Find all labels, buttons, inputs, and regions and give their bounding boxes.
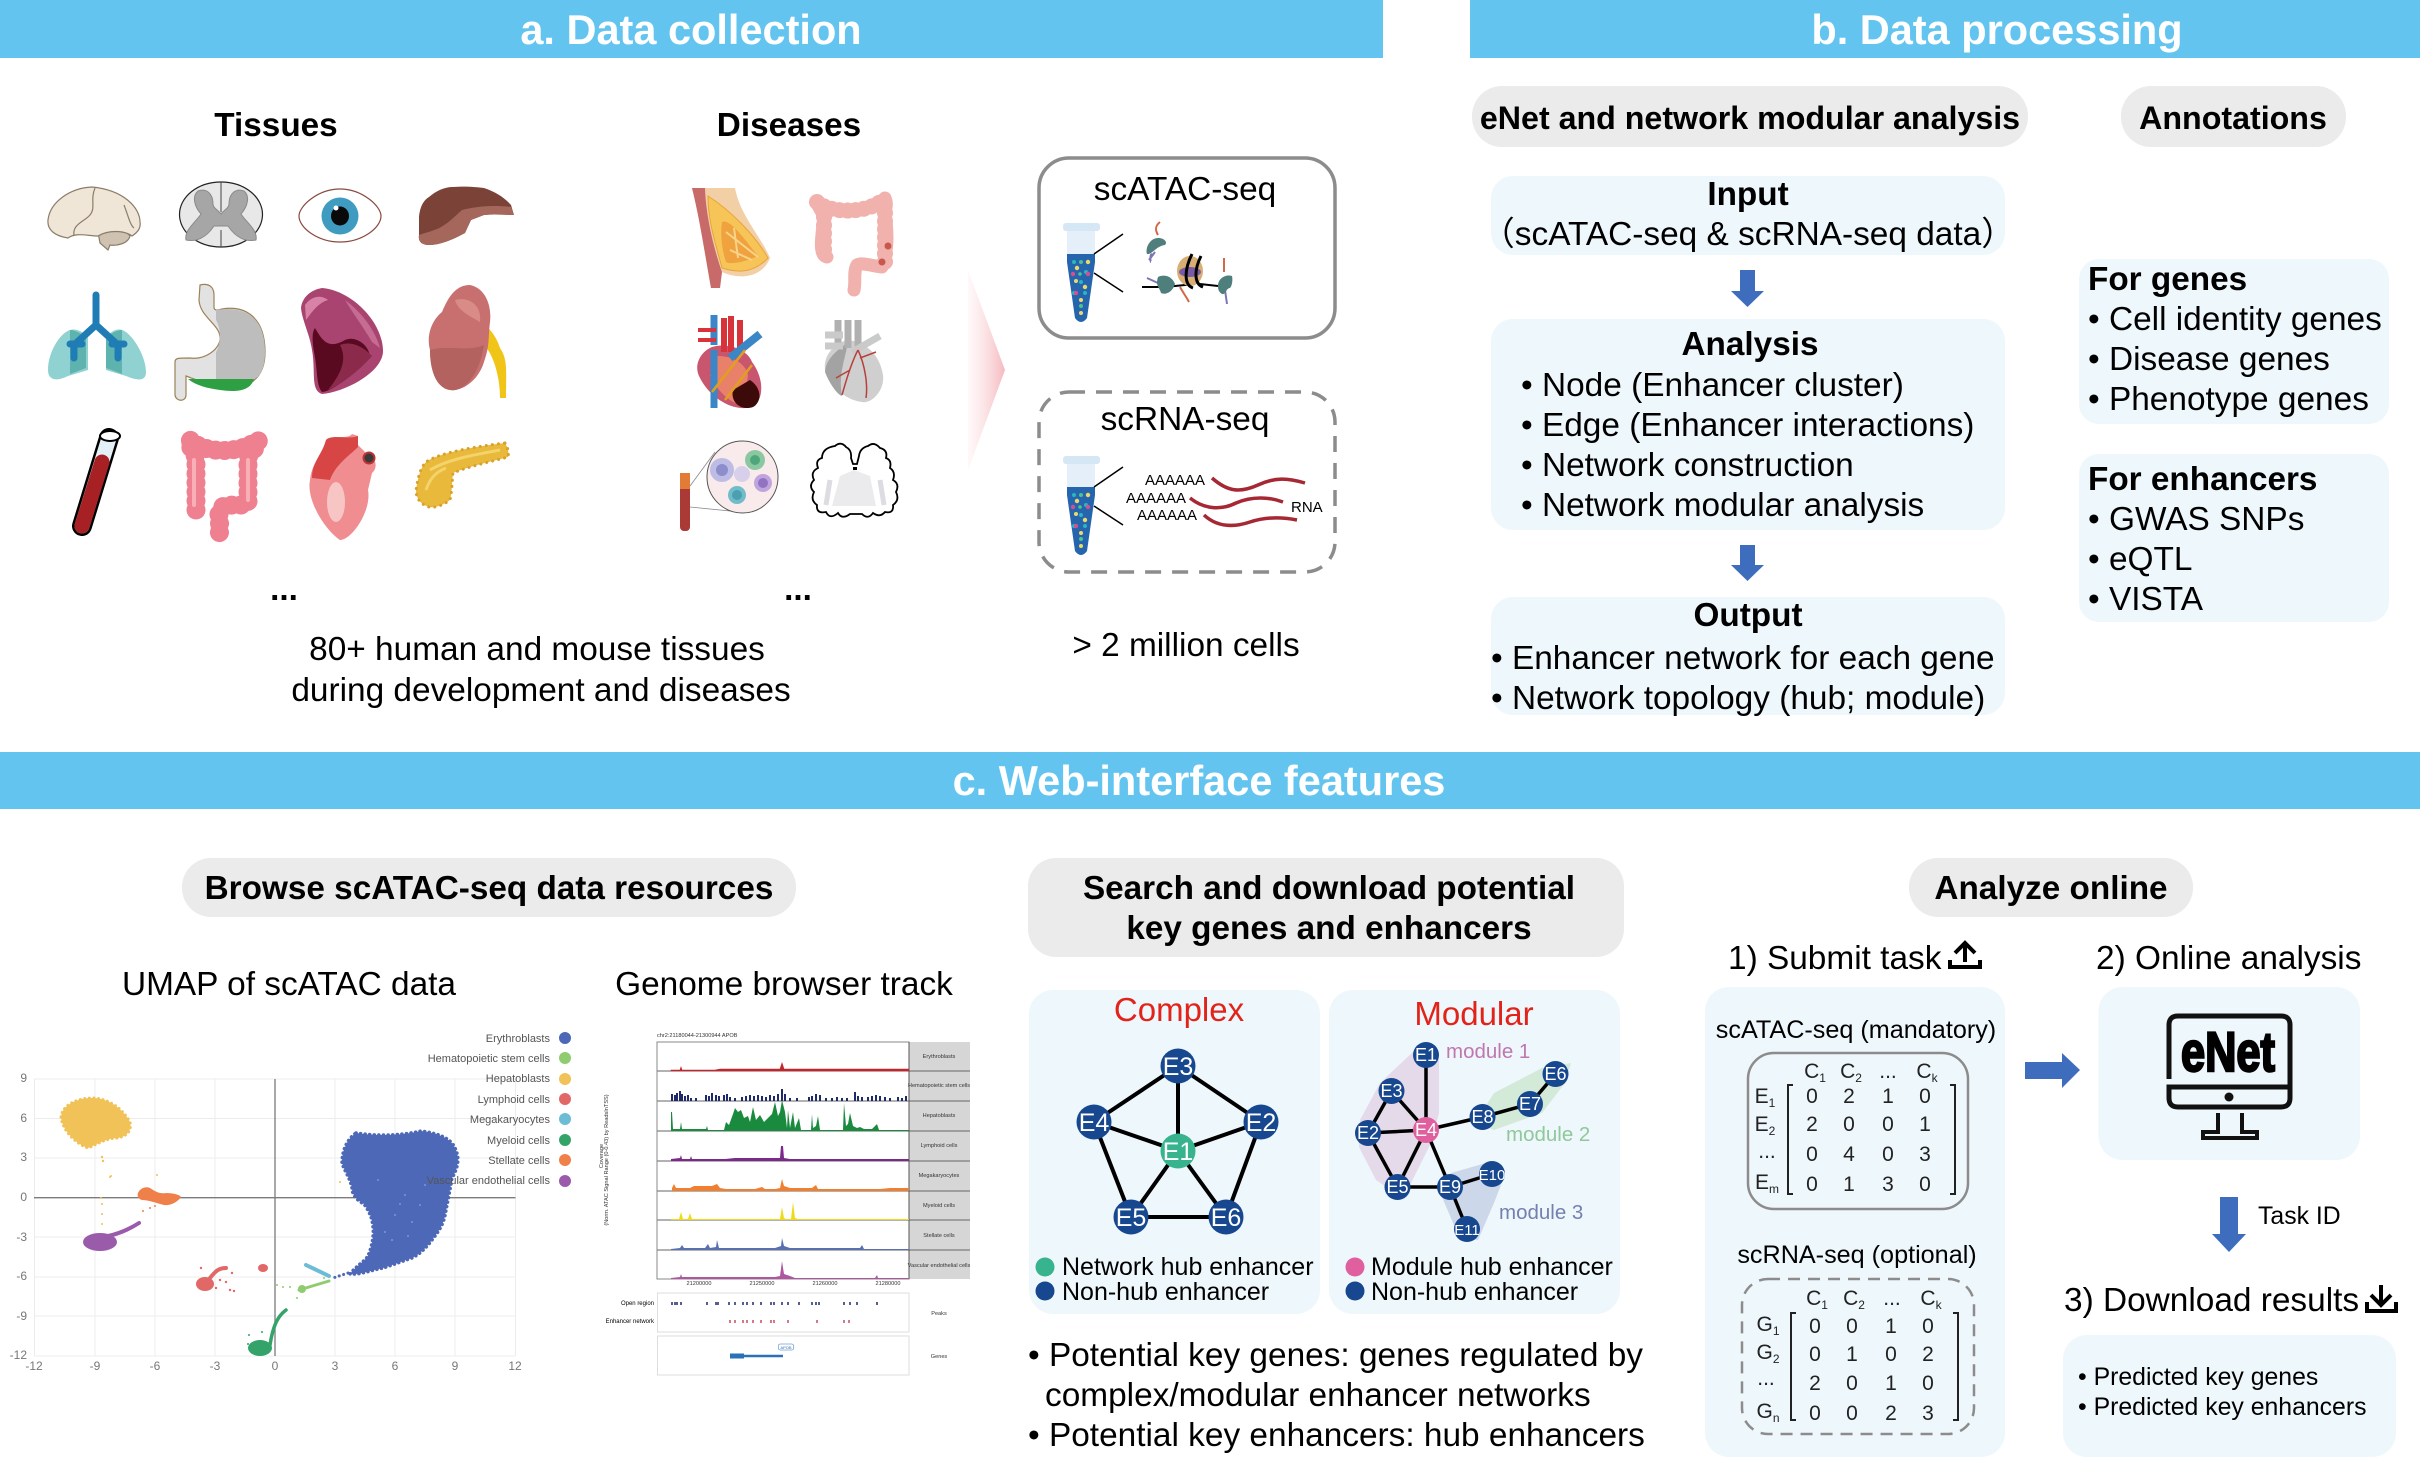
matrix: scATAC-seq: 1 — [1919, 1113, 1931, 1136]
matrix: scRNA-seq: 1 — [1773, 1324, 1780, 1338]
heading: UMAP: UMAP of scATAC data — [122, 966, 456, 1003]
nodes: E6 — [1211, 1204, 1241, 1232]
nodes — [1355, 1042, 1568, 1242]
module labels: module 2 — [1506, 1123, 1590, 1146]
track labels: Erythroblasts — [923, 1054, 956, 1060]
matrix: scATAC-seq: C — [1916, 1060, 1932, 1083]
icon: download — [2367, 1285, 2396, 1311]
matrix: scRNA-seq: G — [1756, 1341, 1773, 1364]
axis labels: 6 — [392, 1359, 399, 1373]
heading: Diseases: Diseases — [717, 107, 861, 144]
track labels: Myeloid cells — [923, 1203, 955, 1209]
panel: annotations for enhancers: • eQTL — [2088, 541, 2192, 578]
panel: annotations for genes: • Phenotype genes — [2088, 381, 2369, 418]
heading: Genome browser track: Genome browser track — [615, 966, 953, 1003]
text block: tissue summary — [291, 631, 791, 709]
legend: Hepatoblasts — [486, 1073, 550, 1085]
track labels: Hepatoblasts — [923, 1113, 956, 1119]
axis: 21200000 — [687, 1281, 711, 1287]
chart: UMAP scatter — [10, 1032, 571, 1373]
gene box — [658, 1336, 947, 1375]
matrix: scATAC-seq: m — [1769, 1182, 1779, 1196]
axis labels — [10, 1071, 522, 1373]
matrix: scRNA-seq: 2 — [1773, 1352, 1780, 1366]
matrix: scRNA-seq: 2 — [1885, 1402, 1897, 1425]
matrix: scRNA-seq: 1 — [1885, 1372, 1897, 1395]
matrix: scATAC-seq: 0 — [1919, 1173, 1931, 1196]
legend: Stellate cells — [488, 1155, 550, 1167]
axis: (Norm. ATAC Signal Range (0-0.43) by ReadsInTSS) — [604, 1094, 610, 1226]
matrix: scATAC-seq: E — [1755, 1113, 1769, 1136]
panel: modular network — [1329, 990, 1620, 1314]
arrow: collection to assays — [968, 270, 1005, 470]
nodes: E3 — [1163, 1053, 1193, 1081]
arrow: submit to analysis — [2025, 1053, 2080, 1088]
RNA strands: RNA — [1291, 499, 1323, 516]
module labels: module 1 — [1446, 1040, 1530, 1063]
matrix: scATAC-seq: 0 — [1882, 1113, 1894, 1136]
matrix: scRNA-seq: k — [1936, 1298, 1943, 1312]
heading pill: Browse scATAC-seq data resources — [182, 858, 796, 917]
nodes: E1 — [1415, 1045, 1437, 1065]
matrix: scRNA-seq: 0 — [1922, 1372, 1934, 1395]
track: stellate cells — [671, 1238, 909, 1250]
axis labels: 9 — [20, 1071, 27, 1085]
icon: spinal cord — [180, 182, 262, 247]
panel: scATAC-seq — [1039, 158, 1335, 338]
text block: potential key genes and enhancers: • Potential key enhancers: hub enhancers — [1028, 1417, 1645, 1454]
nodes: E9 — [1439, 1177, 1461, 1197]
matrix: scATAC-seq: 1 — [1769, 1096, 1776, 1110]
panel: scRNA-seq — [1039, 392, 1335, 572]
cluster: hepatoblasts — [61, 1098, 341, 1225]
matrix: scATAC-seq — [1748, 1053, 1968, 1209]
panel: complex network — [1029, 990, 1320, 1314]
nodes: E3 — [1380, 1081, 1403, 1101]
nodes: E1 — [1163, 1138, 1193, 1166]
axis labels: -6 — [16, 1269, 27, 1283]
nodes: E6 — [1544, 1064, 1567, 1084]
track labels: Megakaryocytes — [919, 1173, 960, 1179]
module labels — [1446, 1040, 1590, 1224]
panel: analysis: Analysis — [1682, 326, 1818, 363]
axis labels: 0 — [272, 1359, 279, 1373]
axis labels: -3 — [210, 1359, 221, 1373]
peaks box: Peaks — [931, 1311, 947, 1317]
panel: annotations for enhancers: • VISTA — [2088, 581, 2204, 618]
icon: blood and immune cells — [680, 441, 778, 531]
header: b. Data processing: b. Data processing — [1811, 6, 2183, 53]
heading: Tissues: Tissues — [214, 107, 338, 144]
text block: potential key genes and enhancers: • Potential key genes: genes regulated by — [1028, 1337, 1643, 1374]
axis labels: -6 — [150, 1359, 161, 1373]
peaks box — [606, 1293, 947, 1332]
cluster: lymphoid cells — [196, 1264, 268, 1292]
text block: tissue summary: 80+ human and mouse tissues — [309, 631, 765, 668]
legend: Erythroblasts — [486, 1033, 550, 1045]
icon: diseased colon — [817, 198, 892, 290]
matrix: scRNA-seq: 0 — [1885, 1343, 1897, 1366]
matrix: scRNA-seq: C — [1920, 1287, 1936, 1310]
icon: liver — [419, 187, 514, 245]
nodes: E5 — [1116, 1204, 1146, 1232]
nodes: E5 — [1386, 1177, 1409, 1197]
matrix: scRNA-seq: ... — [1757, 1367, 1775, 1390]
panel: submit task matrices: scRNA-seq (optional) — [1737, 1241, 1977, 1269]
cluster: stellate cells — [138, 1187, 181, 1212]
panel: annotations for enhancers: For enhancers — [2088, 461, 2317, 498]
matrix: scATAC-seq: E — [1755, 1171, 1769, 1194]
heading pill: eNet and network modular analysis: eNet and network modular analysis — [1480, 100, 2020, 136]
header: a. Data collection — [0, 0, 1383, 58]
panel: output: • Enhancer network for each gene — [1491, 640, 1995, 677]
panel: results: • Predicted key genes — [2078, 1364, 2318, 1391]
icon: lungs — [48, 295, 146, 379]
icon: breast — [692, 188, 770, 288]
heading: 3) Download results: 3) Download results — [2064, 1282, 2359, 1319]
panel: annotations for genes: • Cell identity genes — [2088, 301, 2382, 338]
panel: output: • Network topology (hub; module) — [1491, 680, 1985, 717]
panel: modular network: Modular — [1414, 995, 1534, 1032]
axis labels: 3 — [20, 1150, 27, 1164]
icon: eye — [299, 189, 381, 242]
matrix: scATAC-seq: k — [1932, 1071, 1939, 1085]
track: vascular endothelial cells — [671, 1261, 909, 1279]
panel: annotations for enhancers: • GWAS SNPs — [2088, 501, 2304, 538]
axis: 21260000 — [813, 1281, 837, 1287]
nodes: E2 — [1246, 1109, 1276, 1137]
panel: output: Output — [1693, 597, 1803, 634]
panel: complex network: Complex — [1114, 991, 1245, 1028]
text: cell count: > 2 million cells — [1072, 627, 1300, 664]
icon: upload — [1950, 943, 1980, 967]
arrow: analysis to output — [1731, 545, 1764, 581]
axis labels: -12 — [25, 1359, 43, 1373]
matrix: scRNA-seq: 0 — [1846, 1402, 1858, 1425]
matrix: scRNA-seq: 0 — [1809, 1402, 1821, 1425]
matrix: scATAC-seq: 2 — [1769, 1124, 1776, 1138]
matrix: scATAC-seq: 4 — [1843, 1143, 1855, 1166]
ellipsis: tissues: ... — [270, 571, 298, 608]
matrix: scATAC-seq: 3 — [1919, 1143, 1931, 1166]
panel: input: （scATAC-seq & scRNA-seq data） — [1481, 216, 2015, 253]
cluster: vascular endothelial cells — [83, 1223, 139, 1251]
header: a. Data collection: a. Data collection — [520, 6, 862, 53]
panel: input: Input — [1707, 176, 1789, 213]
matrix: scRNA-seq: 0 — [1809, 1315, 1821, 1338]
axis labels: -9 — [90, 1359, 101, 1373]
track: megakaryocytes — [672, 1179, 909, 1191]
heading pill: Annotations: Annotations — [2139, 100, 2327, 136]
matrix: scATAC-seq: 3 — [1882, 1173, 1894, 1196]
legend: Megakaryocytes — [470, 1114, 550, 1126]
legend: Hematopoietic stem cells — [428, 1053, 550, 1065]
matrix: scRNA-seq: G — [1756, 1313, 1773, 1336]
axis: Coverage — [599, 1144, 605, 1168]
matrix: scRNA-seq: ... — [1883, 1287, 1901, 1310]
matrix: scRNA-seq: C — [1806, 1287, 1821, 1310]
nodes: E10 — [1479, 1167, 1505, 1184]
matrix: scRNA-seq: 0 — [1846, 1372, 1858, 1395]
matrix: scATAC-seq: 0 — [1843, 1113, 1855, 1136]
icon: brain slice — [811, 444, 897, 517]
matrix: scATAC-seq: 0 — [1806, 1143, 1818, 1166]
RNA strands: AAAAAA — [1126, 490, 1186, 507]
axis labels: 6 — [20, 1111, 27, 1125]
heading: 2) Online analysis: 2) Online analysis — [2096, 940, 2361, 977]
text block: tissue summary: during development and diseases — [291, 672, 791, 709]
matrix: scRNA-seq: 2 — [1858, 1298, 1865, 1312]
panel: annotations for genes — [2079, 259, 2389, 424]
track: hematopoietic stem cells — [672, 1089, 906, 1101]
track labels: Vascular endothelial cells — [908, 1263, 971, 1269]
gene box: Genes — [931, 1354, 947, 1360]
panel: annotations for genes: For genes — [2088, 261, 2247, 298]
legend: Myeloid cells — [487, 1135, 550, 1147]
cluster: megakaryocytes — [306, 1265, 329, 1276]
matrix: scRNA-seq: 0 — [1846, 1315, 1858, 1338]
track labels: Stellate cells — [923, 1233, 955, 1239]
axis labels: -3 — [16, 1230, 27, 1244]
heading pill: Search and download — [1028, 858, 1624, 957]
header: b. Data processing — [1470, 0, 2420, 58]
matrix: scRNA-seq: G — [1756, 1400, 1773, 1423]
ellipsis: diseases: ... — [784, 571, 812, 608]
heading pill: Search and download: Search and download potential — [1083, 870, 1575, 907]
axis: 21250000 — [750, 1281, 774, 1287]
cluster: erythroblasts — [333, 1131, 458, 1278]
icon: eNet monitor — [2169, 1016, 2290, 1138]
legend — [427, 1032, 571, 1187]
module labels: module 3 — [1499, 1201, 1583, 1224]
cluster: hematopoietic stem cells — [276, 1277, 329, 1299]
panel: online analysis — [2098, 987, 2360, 1160]
legend: Non-hub enhancer — [1062, 1278, 1269, 1306]
panel: analysis: • Network modular analysis — [1521, 487, 1924, 524]
legend — [1346, 1253, 1613, 1306]
peaks box: Enhancer network — [606, 1319, 655, 1325]
header: c. Web-interface features: c. Web-interface features — [953, 757, 1445, 804]
panel: input — [1481, 176, 2015, 255]
RNA strands — [1126, 472, 1323, 525]
matrix: scATAC-seq: 2 — [1855, 1071, 1862, 1085]
heading pill: eNet and network modular analysis — [1472, 86, 2028, 147]
matrix: scATAC-seq: 1 — [1882, 1085, 1894, 1108]
track labels: Lymphoid cells — [921, 1143, 958, 1149]
panel: analysis — [1491, 319, 2005, 530]
peaks box: Open region — [621, 1301, 654, 1307]
matrix: scATAC-seq: C — [1840, 1060, 1855, 1083]
track: lymphoid cells — [671, 1146, 909, 1161]
track: myeloid cells — [671, 1202, 909, 1220]
RNA strands: AAAAAA — [1145, 472, 1205, 489]
panel: annotations for enhancers — [2079, 454, 2389, 622]
icon: heart — [309, 434, 376, 540]
nodes — [1076, 1048, 1278, 1234]
nodes: E4 — [1079, 1109, 1109, 1137]
heading pill: Analyze online: Analyze online — [1934, 870, 2168, 907]
nodes: E11 — [1454, 1222, 1480, 1239]
heading: 1) Submit task: 1) Submit task — [1728, 940, 1942, 977]
heading pill: Analyze online — [1909, 858, 2193, 917]
icon: pancreas — [416, 443, 508, 507]
panel: analysis: • Node (Enhancer cluster) — [1521, 367, 1904, 404]
heading pill: Search and download: key genes and enhancers — [1126, 910, 1532, 947]
matrix: scATAC-seq: 0 — [1919, 1085, 1931, 1108]
nodes: E4 — [1415, 1120, 1437, 1140]
matrix: scATAC-seq: E — [1755, 1085, 1769, 1108]
panel: scRNA-seq: scRNA-seq — [1101, 401, 1269, 438]
matrix: scATAC-seq: 0 — [1806, 1173, 1818, 1196]
cluster: myeloid cells — [247, 1310, 286, 1356]
heading pill: Browse scATAC-seq data resources: Browse scATAC-seq data resources — [205, 870, 773, 907]
gene box: APOB — [780, 1345, 792, 1350]
arrow: Task ID — [2212, 1197, 2246, 1252]
axis: 21280000 — [876, 1281, 900, 1287]
axis labels: 9 — [452, 1359, 459, 1373]
panel: submit task matrices: scATAC-seq (mandatory) — [1716, 1016, 1996, 1044]
arrow: input to analysis — [1731, 270, 1764, 307]
legend — [1036, 1253, 1314, 1306]
axis labels: -9 — [16, 1309, 27, 1323]
panel: submit task matrices — [1705, 987, 2005, 1457]
matrix: scATAC-seq: ... — [1879, 1060, 1897, 1083]
matrix: scATAC-seq: 1 — [1819, 1071, 1826, 1085]
text block: potential key genes and enhancers — [1028, 1337, 1645, 1454]
text block: potential key genes and enhancers: complex/modular enhancer networks — [1045, 1377, 1591, 1414]
chart: genome browser track — [599, 1033, 971, 1375]
chart: genome browser track: chr2:21180044-21300944 APOB — [657, 1033, 738, 1039]
panel: output — [1491, 597, 2005, 717]
track labels — [908, 1054, 971, 1269]
icon: spleen — [301, 288, 383, 394]
axis — [599, 1094, 900, 1287]
icon: brain — [48, 187, 140, 250]
matrix: scRNA-seq: 2 — [1809, 1372, 1821, 1395]
panel: annotations for genes: • Disease genes — [2088, 341, 2330, 378]
matrix: scATAC-seq: 2 — [1843, 1085, 1855, 1108]
icon: grey heart — [825, 320, 883, 402]
matrix: scATAC-seq: 1 — [1843, 1173, 1855, 1196]
track: hepatoblasts — [671, 1100, 909, 1131]
matrix: scATAC-seq: 2 — [1806, 1113, 1818, 1136]
nodes: E7 — [1519, 1094, 1541, 1114]
track: erythroblasts — [671, 1063, 909, 1071]
matrix: scRNA-seq: 0 — [1922, 1315, 1934, 1338]
matrix: scRNA-seq: 0 — [1809, 1343, 1821, 1366]
axis labels: -12 — [10, 1348, 27, 1362]
matrix: scRNA-seq: n — [1773, 1411, 1780, 1425]
matrix: scRNA-seq: C — [1843, 1287, 1858, 1310]
legend: Non-hub enhancer — [1371, 1278, 1578, 1306]
legend: Module hub enhancer — [1371, 1253, 1613, 1281]
legend: Network hub enhancer — [1062, 1253, 1314, 1281]
matrix: scATAC-seq: 0 — [1882, 1143, 1894, 1166]
matrix: scRNA-seq — [1742, 1279, 1974, 1434]
legend: Lymphoid cells — [478, 1094, 550, 1106]
nodes: E2 — [1357, 1123, 1379, 1143]
axis labels: 12 — [508, 1359, 522, 1373]
heading pill: Annotations — [2121, 86, 2346, 147]
panel: analysis: • Edge (Enhancer interactions) — [1521, 407, 1974, 444]
matrix: scATAC-seq: 0 — [1806, 1085, 1818, 1108]
matrix: scRNA-seq: 1 — [1885, 1315, 1897, 1338]
icon: stomach — [175, 284, 265, 400]
nodes: E8 — [1471, 1107, 1494, 1127]
matrix: scATAC-seq: C — [1804, 1060, 1819, 1083]
RNA strands: AAAAAA — [1137, 507, 1197, 524]
icon: colon — [189, 440, 258, 534]
matrix: scRNA-seq: 3 — [1922, 1402, 1934, 1425]
legend: Vascular endothelial cells — [427, 1175, 550, 1187]
matrix: scRNA-seq: 1 — [1821, 1298, 1828, 1312]
matrix: scATAC-seq: ... — [1758, 1140, 1776, 1163]
track labels: Hematopoietic stem cells — [908, 1083, 970, 1089]
axis labels: 3 — [332, 1359, 339, 1373]
icon: blood tube — [82, 431, 120, 526]
axis labels: 0 — [20, 1190, 27, 1204]
icon: eNet monitor: eNet — [2181, 1020, 2275, 1083]
panel: results — [2063, 1335, 2396, 1457]
panel: results: • Predicted key enhancers — [2078, 1394, 2366, 1421]
matrix: scRNA-seq: 1 — [1846, 1343, 1858, 1366]
header: c. Web-interface features — [0, 752, 2420, 809]
icon: diseased heart — [697, 315, 761, 408]
matrix: scRNA-seq: 2 — [1922, 1343, 1934, 1366]
panel: scATAC-seq: scATAC-seq — [1094, 171, 1276, 208]
icon: chromatin and transposase — [1142, 222, 1232, 304]
track label strip — [909, 1042, 970, 1279]
label: Task ID: Task ID — [2258, 1203, 2341, 1230]
icon: kidney — [429, 285, 506, 398]
panel: analysis: • Network construction — [1521, 447, 1854, 484]
